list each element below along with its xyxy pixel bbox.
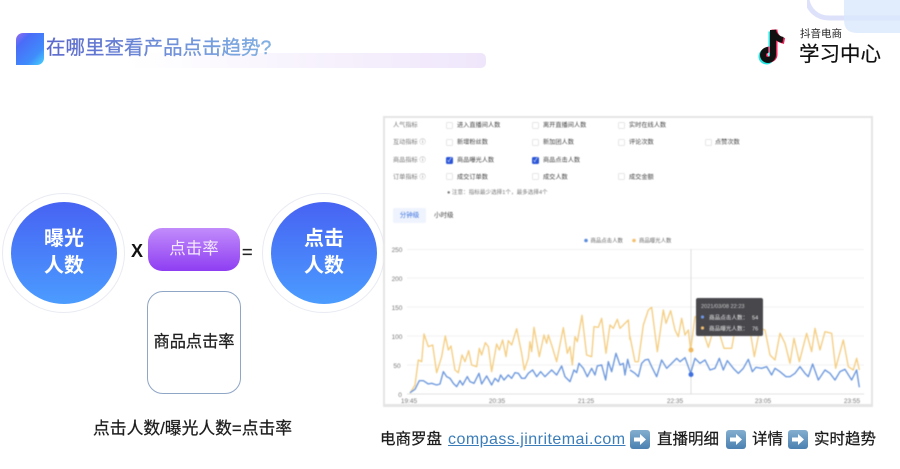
checkbox [446,173,453,180]
option: 实时在线人数 [629,122,666,129]
circle text: 点击人数 [271,202,377,304]
checkbox [705,139,712,146]
caption: 直播明细: 直播明细 [657,431,719,448]
checkbox [532,122,539,129]
circle: exposure users [2,193,125,313]
circle text: 点击人数: 人数 [304,255,344,277]
pill: click rate [148,228,240,271]
tooltip: 2021/03/08 22:23 [701,304,745,310]
tooltip: 商品曝光人数： [709,324,748,332]
caption link: compass.jinritemai.com [448,431,626,448]
logo: TikTok note and learning center [758,28,881,66]
circle text: 曝光人数: 人数 [44,255,84,277]
option: 商品曝光人数 [457,157,494,164]
option: 商品点击人数 [543,157,580,164]
checkbox [446,122,453,129]
x axis labels [401,398,861,405]
x axis labels: 23:05 [755,398,772,405]
y axis labels [392,247,403,399]
metric options [393,121,740,196]
chart: click trend [392,236,864,405]
row label: 互动指标: 互动指标 ⓘ [393,139,426,146]
icon: title badge [16,33,44,65]
checkbox: checked: ✓ [447,158,452,164]
tab: minute level [393,208,426,223]
checkbox: checked [532,157,539,164]
circle text: 点击人数: 点击 [304,228,344,250]
caption: 实时趋势: 实时趋势 [814,431,876,448]
checkbox: checked: ✓ [533,158,538,164]
x axis labels: 22:35 [667,398,684,405]
option: 进入直播间人数 [457,122,500,129]
crosshair [690,249,692,394]
tooltip: 54 [752,316,758,322]
caption: 详情: 详情 [752,431,783,448]
checkbox [618,122,625,129]
option: 新加团人数 [543,139,574,146]
series: exposure users [410,307,859,393]
icon: arrow 2 [726,430,746,449]
icon: arrow 3 [788,430,808,449]
checkbox: checked [446,157,453,164]
checkbox [532,139,539,146]
legend [584,236,672,244]
logo main text: 学习中心 [799,43,881,66]
y axis labels: 0 [398,392,402,399]
checkbox [618,173,625,180]
tooltip: 商品点击人数： [709,314,748,322]
checkbox [446,139,453,146]
option: 评论次数 [629,139,654,146]
x axis labels: 20:35 [489,398,506,405]
option: 点赞次数 [715,139,740,146]
x axis labels: 23:55 [844,398,861,405]
circle: click users [262,193,385,313]
y axis labels: 100 [392,334,403,341]
tooltip [696,298,763,336]
checkbox [618,139,625,146]
option: 成交金额 [629,174,654,181]
note: ● 注意：指标最少选择1个，最多选择4个 [447,190,548,196]
legend: 商品曝光人数 [639,236,672,244]
decoration: top-right corner shapes [807,0,900,33]
tab: hour level: 小时级 [434,212,454,219]
legend: 商品点击人数 [590,236,623,244]
operator: equals: = [242,242,253,262]
icon: arrow 1 [630,430,650,449]
panel: compass screenshot [383,116,873,407]
formula text: 点击人数/曝光人数=点击率 [93,419,292,438]
circle text: 曝光人数: 曝光 [44,228,84,250]
crosshair markers [688,348,694,377]
option: 成交订单数 [457,174,488,181]
tooltip: 76 [752,326,758,332]
title highlight band [130,53,486,68]
option: 成交人数 [543,174,568,181]
logo small text: 抖音电商 [800,28,842,40]
box: product click rate: 商品点击率 [154,333,234,351]
title: 在哪里查看产品点击趋势? [46,37,271,59]
row label: 订单指标: 订单指标 ⓘ [393,174,426,181]
circle text: 曝光人数 [11,202,117,304]
y axis labels: 150 [392,305,403,312]
option: 离开直播间人数 [543,122,586,129]
option: 新增粉丝数 [457,139,488,146]
x axis labels: 21:25 [578,398,595,405]
caption: 电商罗盘: 电商罗盘 [380,431,442,448]
series: click users [410,353,859,393]
checkbox [532,173,539,180]
operator: multiply: X [131,241,143,261]
y axis labels: 250 [392,247,403,254]
box: product click rate [147,291,241,394]
tab: minute level: 分钟级 [400,212,419,219]
pill: click rate: 点击率 [169,240,219,258]
row label: 人气指标: 人气指标 [393,122,418,129]
x axis labels: 19:45 [401,398,418,405]
y axis labels: 50 [393,363,401,370]
row label: 商品指标: 商品指标 ⓘ [393,157,426,164]
y axis labels: 200 [392,276,403,283]
